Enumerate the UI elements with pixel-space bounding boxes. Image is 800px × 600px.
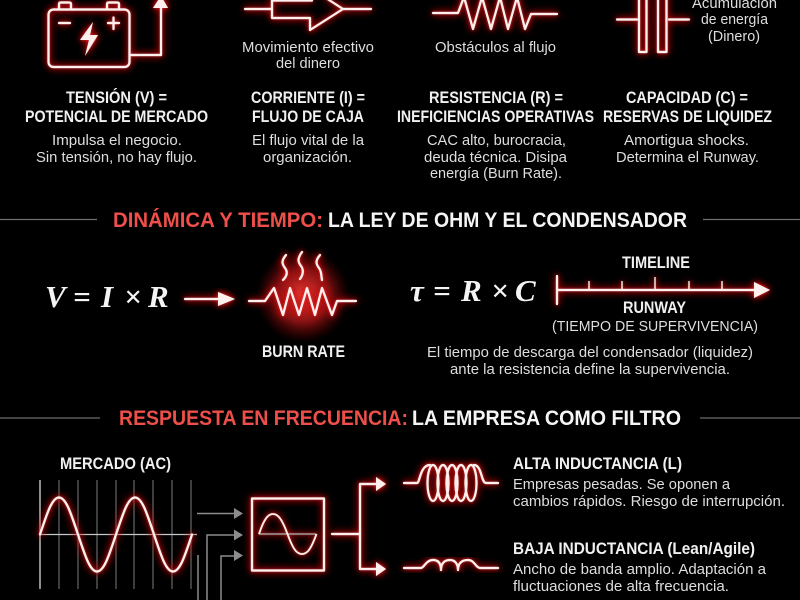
- heading: capacidad: RESERVAS DE LIQUIDEZ: [603, 108, 772, 126]
- label: burn rate: BURN RATE: [262, 343, 345, 361]
- text: resistencia description: CAC alto, burocracia,: [427, 132, 566, 149]
- heading: dinámica y tiempo: DINÁMICA Y TIEMPO:: [113, 207, 323, 232]
- arrow: ohm to burn rate: [185, 292, 235, 306]
- icon: capacitor: [617, 0, 689, 52]
- icon: current arrow: [245, 0, 371, 30]
- text: corriente caption: [242, 39, 374, 72]
- text: runway description: [427, 344, 753, 378]
- text: alta inductancia: Empresas pesadas. Se oponen a: [513, 476, 731, 493]
- heading: respuesta en frecuencia: [119, 406, 681, 430]
- panel: resistencia: [397, 0, 594, 182]
- icon: resistor: [433, 0, 557, 29]
- heading: capacidad: [603, 89, 772, 126]
- text: baja inductancia: BAJA INDUCTANCIA (Lean/Agile): [513, 540, 755, 558]
- heading: corriente: [251, 89, 365, 126]
- text: capacidad caption: de energía: [701, 11, 769, 28]
- text: tensión description: [36, 132, 197, 166]
- text: baja inductancia: fluctuaciones de alta frecuencia.: [513, 578, 729, 595]
- label: runway: (TIEMPO DE SUPERVIVENCIA): [552, 318, 758, 335]
- text: runway description: El tiempo de descarga del condensador (liquidez): [427, 344, 753, 361]
- heading: resistencia: [397, 89, 594, 126]
- heading: corriente: FLUJO DE CAJA: [252, 108, 364, 126]
- heading: corriente: CORRIENTE (I) =: [251, 89, 365, 107]
- arrows: filter outputs: [332, 477, 386, 576]
- text: resistencia caption: Obstáculos al flujo: [435, 39, 556, 56]
- text: capacidad description: [616, 132, 759, 166]
- heading: dinámica y tiempo: [113, 207, 687, 232]
- chart: market sine wave: [40, 480, 197, 589]
- text: capacidad caption: [692, 0, 777, 45]
- panel: corriente: [242, 0, 374, 166]
- text: corriente description: [252, 132, 365, 166]
- heading: tensión: TENSIÓN (V) =: [66, 88, 167, 107]
- text: tensión description: Sin tensión, no hay flujo.: [36, 149, 197, 166]
- text: capacidad description: Amortigua shocks.: [624, 132, 749, 149]
- label: runway: RUNWAY: [623, 299, 686, 317]
- formula: tau: τ = R × C: [410, 273, 536, 308]
- heading: tensión: POTENCIAL DE MERCADO: [25, 108, 208, 126]
- text: resistencia description: deuda técnica. Disipa: [424, 149, 568, 166]
- text: alta inductancia: ALTA INDUCTANCIA (L): [513, 455, 682, 473]
- text: corriente description: El flujo vital de la: [252, 132, 365, 149]
- heading: respuesta en frecuencia: RESPUESTA EN FRECUENCIA:: [119, 406, 408, 430]
- text: corriente caption: Movimiento efectivo: [242, 39, 374, 56]
- text: baja inductancia: Ancho de banda amplio. Adaptación a: [513, 561, 767, 578]
- text: alta inductancia: cambios rápidos. Riesgo de interrupción.: [513, 493, 785, 510]
- text: corriente description: organización.: [263, 149, 352, 166]
- heading: tensión: [25, 88, 208, 126]
- label: runway: [552, 299, 758, 335]
- formula: ley de ohm: V = I × R: [45, 279, 169, 314]
- icon: filter box: [252, 498, 324, 570]
- text: capacidad caption: (Dinero): [708, 28, 760, 45]
- label: timeline: TIMELINE: [622, 254, 690, 272]
- icon: burning resistor: [249, 249, 356, 343]
- text: tensión description: Impulsa el negocio.: [52, 132, 182, 149]
- text: corriente caption: del dinero: [276, 55, 340, 72]
- text: alta inductancia: [513, 455, 785, 510]
- text: baja inductancia: [513, 540, 767, 595]
- text: resistencia description: [424, 132, 568, 182]
- text: resistencia description: energía (Burn Rate).: [430, 165, 562, 182]
- chart: timeline arrow: [557, 276, 770, 304]
- icon: low inductance coil: [404, 560, 498, 570]
- heading: resistencia: RESISTENCIA (R) =: [429, 89, 563, 107]
- text: runway description: ante la resistencia define la supervivencia.: [450, 361, 730, 378]
- icon: high inductance coil: [404, 465, 498, 501]
- icon: battery with arrow: [48, 0, 168, 67]
- heading: resistencia: INEFICIENCIAS OPERATIVAS: [397, 108, 594, 126]
- heading: dinámica y tiempo: LA LEY DE OHM Y EL CONDENSADOR: [328, 208, 687, 232]
- arrows: inputs to filter: [197, 508, 243, 600]
- heading: respuesta en frecuencia: LA EMPRESA COMO FILTRO: [412, 406, 681, 430]
- text: capacidad description: Determina el Runway.: [616, 149, 759, 166]
- heading: capacidad: CAPACIDAD (C) =: [626, 89, 748, 107]
- label: mercado: MERCADO (AC): [60, 455, 171, 473]
- panel: tensión: [25, 0, 208, 166]
- panel: capacidad: [603, 0, 777, 166]
